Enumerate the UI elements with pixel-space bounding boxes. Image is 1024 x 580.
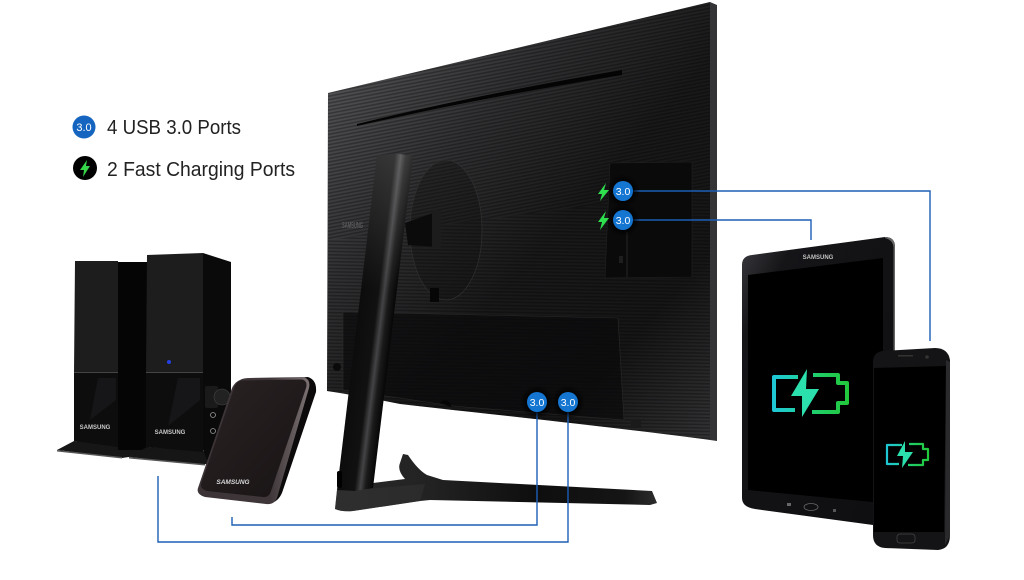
badge: bottom left <box>527 392 547 412</box>
icon: fast charging badge <box>73 156 97 180</box>
monitor back <box>320 0 720 450</box>
line: bottom port to speakers <box>158 412 568 542</box>
stand <box>335 154 657 511</box>
connector lines <box>158 191 930 542</box>
badge: right upper: 3.0 <box>616 186 630 198</box>
external hard drive: SAMSUNG <box>216 479 250 486</box>
icon: USB 3.0 badge <box>72 116 96 138</box>
badge: bottom right: 3.0 <box>561 397 575 409</box>
legend <box>72 116 295 181</box>
stand neck <box>337 154 413 491</box>
volume knob <box>205 386 218 408</box>
stand base <box>335 454 657 511</box>
badge: bottom right <box>558 392 578 412</box>
icon: charging bolt lower <box>598 211 609 230</box>
right speaker <box>129 253 231 466</box>
VESA circle <box>410 160 482 300</box>
legend text: USB ports: 4 USB 3.0 Ports <box>107 117 241 139</box>
legend text: charging ports: 2 Fast Charging Ports <box>107 159 295 181</box>
badge: right lower: 3.0 <box>616 215 630 227</box>
tablet logo: SAMSUNG <box>803 255 834 261</box>
icon: USB 3.0 badge: 3.0 <box>76 122 92 134</box>
badge: right lower <box>613 210 633 230</box>
tablet <box>742 237 895 525</box>
icon: charging bolt upper <box>598 183 609 201</box>
stand arm <box>405 213 440 247</box>
external hard drive <box>198 377 316 504</box>
line: bottom port to hard drive <box>232 412 537 525</box>
icon: phone battery <box>887 441 928 468</box>
speakers <box>57 253 231 466</box>
port badges <box>520 174 640 419</box>
left speaker <box>57 261 150 458</box>
logo: SAMSUNG <box>342 221 363 230</box>
icon: tablet battery <box>774 369 847 417</box>
badge: right upper <box>613 181 633 201</box>
lower cover <box>343 312 624 420</box>
hanging slot <box>357 70 622 126</box>
badge: bottom left: 3.0 <box>530 397 544 409</box>
line: second port to tablet <box>633 220 811 240</box>
port panel <box>605 162 692 278</box>
phone <box>873 348 950 550</box>
left speaker: SAMSUNG <box>80 425 111 431</box>
right speaker: SAMSUNG <box>155 430 186 436</box>
line: top port to phone <box>633 191 930 341</box>
